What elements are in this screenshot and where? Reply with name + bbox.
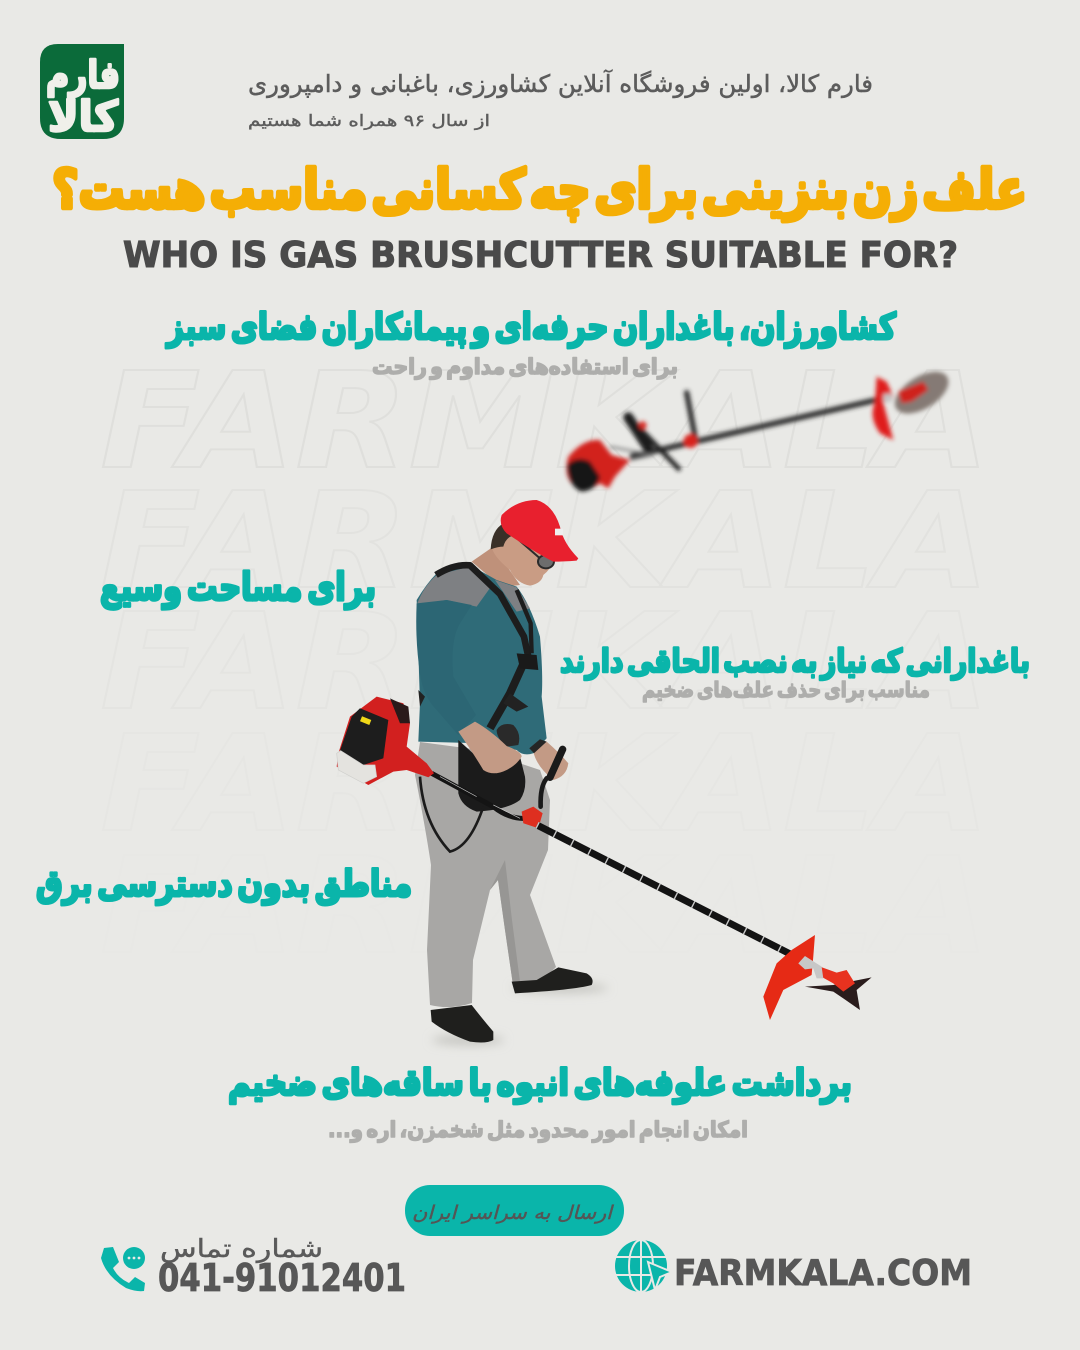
glasses — [515, 537, 554, 568]
right hand — [458, 722, 522, 773]
clamp — [798, 956, 823, 978]
neck and head — [472, 547, 520, 587]
trousers — [415, 742, 556, 1007]
cutting head — [763, 935, 872, 1020]
icon: phone with chat bubble — [101, 1247, 145, 1291]
point 1 heading: کشاورزان، باغداران حرفه‌ای و پیمانکاران فضای سبز — [165, 307, 896, 348]
right grip — [497, 724, 519, 747]
point 5 heading: برداشت علوفه‌های انبوه با ساقه‌های ضخیم — [228, 1063, 852, 1104]
point 1 subtext: برای استفاده‌های مداوم و راحت — [372, 355, 678, 380]
blade — [805, 977, 872, 1010]
contact block — [101, 1234, 406, 1300]
shoes — [431, 967, 593, 1043]
blade guard — [763, 935, 815, 1020]
point 2 heading: برای مساحت وسیع — [100, 565, 376, 610]
red clamp — [522, 807, 543, 828]
man with brushcutter — [337, 500, 872, 1045]
upper body and engine — [337, 500, 578, 852]
watermark: repeated FARMKALA outlines: FARMKALA — [100, 465, 990, 619]
trouser shading — [490, 860, 520, 985]
watermark: repeated FARMKALA outlines — [100, 345, 990, 984]
harness straps — [436, 565, 532, 728]
sweater — [417, 565, 547, 754]
watermark: repeated FARMKALA outlines: FARMKALA — [100, 586, 990, 740]
shoe shadows — [432, 983, 608, 1045]
logo wordmark: فارم — [46, 53, 120, 98]
pill text: ارسال به سراسر ایران — [412, 1202, 615, 1224]
main shaft — [537, 825, 802, 960]
watermark: repeated FARMKALA outlines: FARMKALA — [100, 708, 990, 862]
pill badge — [405, 1185, 624, 1236]
website block — [615, 1240, 972, 1294]
point 3 subtext: مناسب برای حذف علف‌های ضخیم — [642, 678, 930, 702]
icon: globe with cursor — [615, 1240, 672, 1292]
contact label: شماره تماس — [160, 1234, 323, 1263]
title: english: WHO IS GAS BRUSHCUTTER SUITABLE FOR? — [123, 235, 958, 276]
phone number: 041-91012401 — [158, 1256, 406, 1300]
arm — [416, 600, 476, 735]
left hand — [533, 742, 568, 780]
engine — [337, 697, 434, 785]
point 4 heading: مناطق بدون دسترسی برق — [36, 864, 412, 905]
logo wordmark: کالا — [48, 92, 119, 141]
hose — [420, 777, 483, 852]
header text: store description: فارم کالا، اولین فروشگاه آنلاین کشاورزی، باغبانی و دامپروری — [248, 69, 873, 98]
gear head — [818, 967, 855, 992]
logo wordmark — [46, 53, 120, 141]
point 5 subtext: امکان انجام امور محدود مثل شخمزن، اره و... — [328, 1118, 748, 1143]
website url: FARMKALA.COM — [674, 1253, 972, 1294]
left handle — [541, 778, 547, 807]
hip pad — [458, 740, 525, 812]
watermark: repeated FARMKALA outlines: FARMKALA — [100, 830, 990, 984]
cap — [501, 500, 578, 562]
logo — [40, 44, 124, 141]
watermark: repeated FARMKALA outlines: FARMKALA — [100, 345, 990, 499]
header text: since year: از سال ۹۶ همراه شما هستیم — [248, 111, 490, 131]
small blurred brushcutter — [566, 363, 956, 492]
shaft loop — [432, 773, 528, 818]
